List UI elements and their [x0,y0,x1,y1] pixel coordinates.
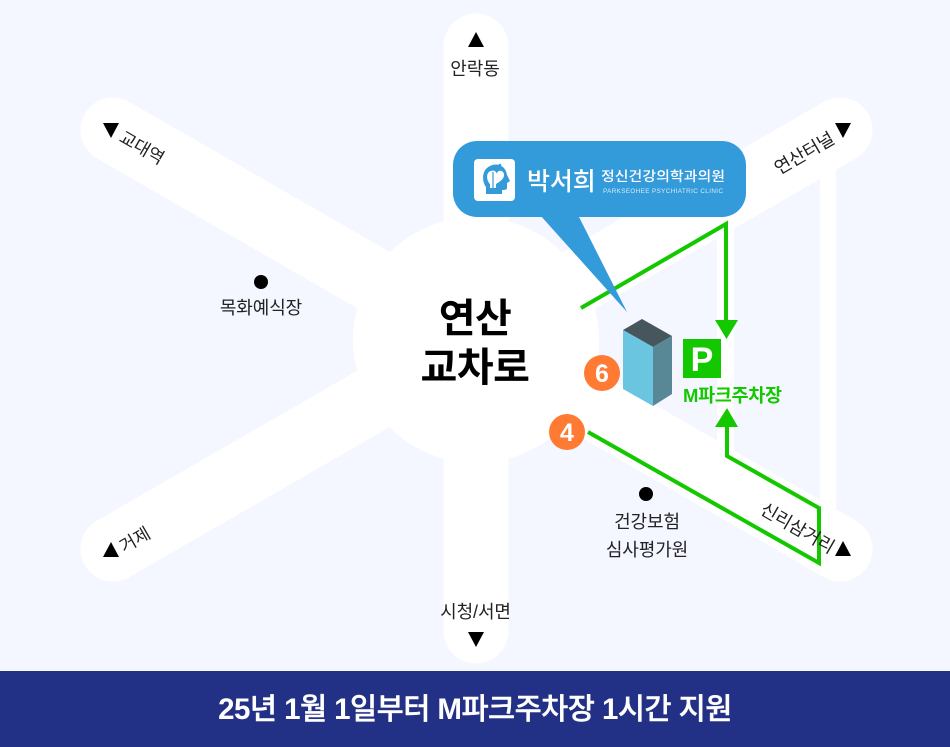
center label: 연산 교차로 [421,297,529,390]
footer banner: 25년 1월 1일부터 M파크주차장 1시간 지원 [218,693,732,726]
landmark: 목화예식장 [220,275,302,318]
clinic English name: PARKSEOHEE PSYCHIATRIC CLINIC [603,188,723,195]
direction label: 신리삼거리: 신리삼거리 [757,499,838,557]
direction label: 시청/서면 [440,602,511,647]
direction label: 연산터널: 연산터널 [771,128,838,178]
clinic name Korean: 박서희 [527,168,596,196]
center label: 연산 교차로: 연산 [439,297,511,341]
direction label: 안락동: 안락동 [450,59,500,79]
parking label: M파크주차장 [683,385,782,406]
landmark: 건강보험 심사평가원: 심사평가원 [606,540,688,560]
direction label: 교대역: 교대역 [116,127,168,168]
badge: exit 4 [549,414,585,450]
parking sign [683,339,721,379]
badge: exit 6 [584,355,620,391]
landmark: 건강보험 심사평가원 [606,487,688,560]
green route: upper approach [581,224,738,339]
icon: head with lightbulb [474,159,515,201]
direction label: 안락동 [450,32,500,79]
green route: lower approach [588,408,819,563]
center label: 연산 교차로: 교차로 [421,346,529,390]
landmark: 건강보험 심사평가원: 건강보험 [614,512,680,532]
clinic subtitle: 정신건강의학과의원 [601,169,725,184]
badge: exit 6: 6 [595,360,609,388]
parking sign: P [691,341,713,379]
roads [113,46,840,631]
badge: exit 4: 4 [560,419,574,447]
direction label: 거제: 거제 [116,523,154,556]
direction label: 시청/서면: 시청/서면 [440,602,511,622]
callout: clinic name [453,141,746,312]
footer banner [0,672,950,747]
landmark: 목화예식장: 목화예식장 [220,298,302,318]
icon: building [623,319,672,406]
